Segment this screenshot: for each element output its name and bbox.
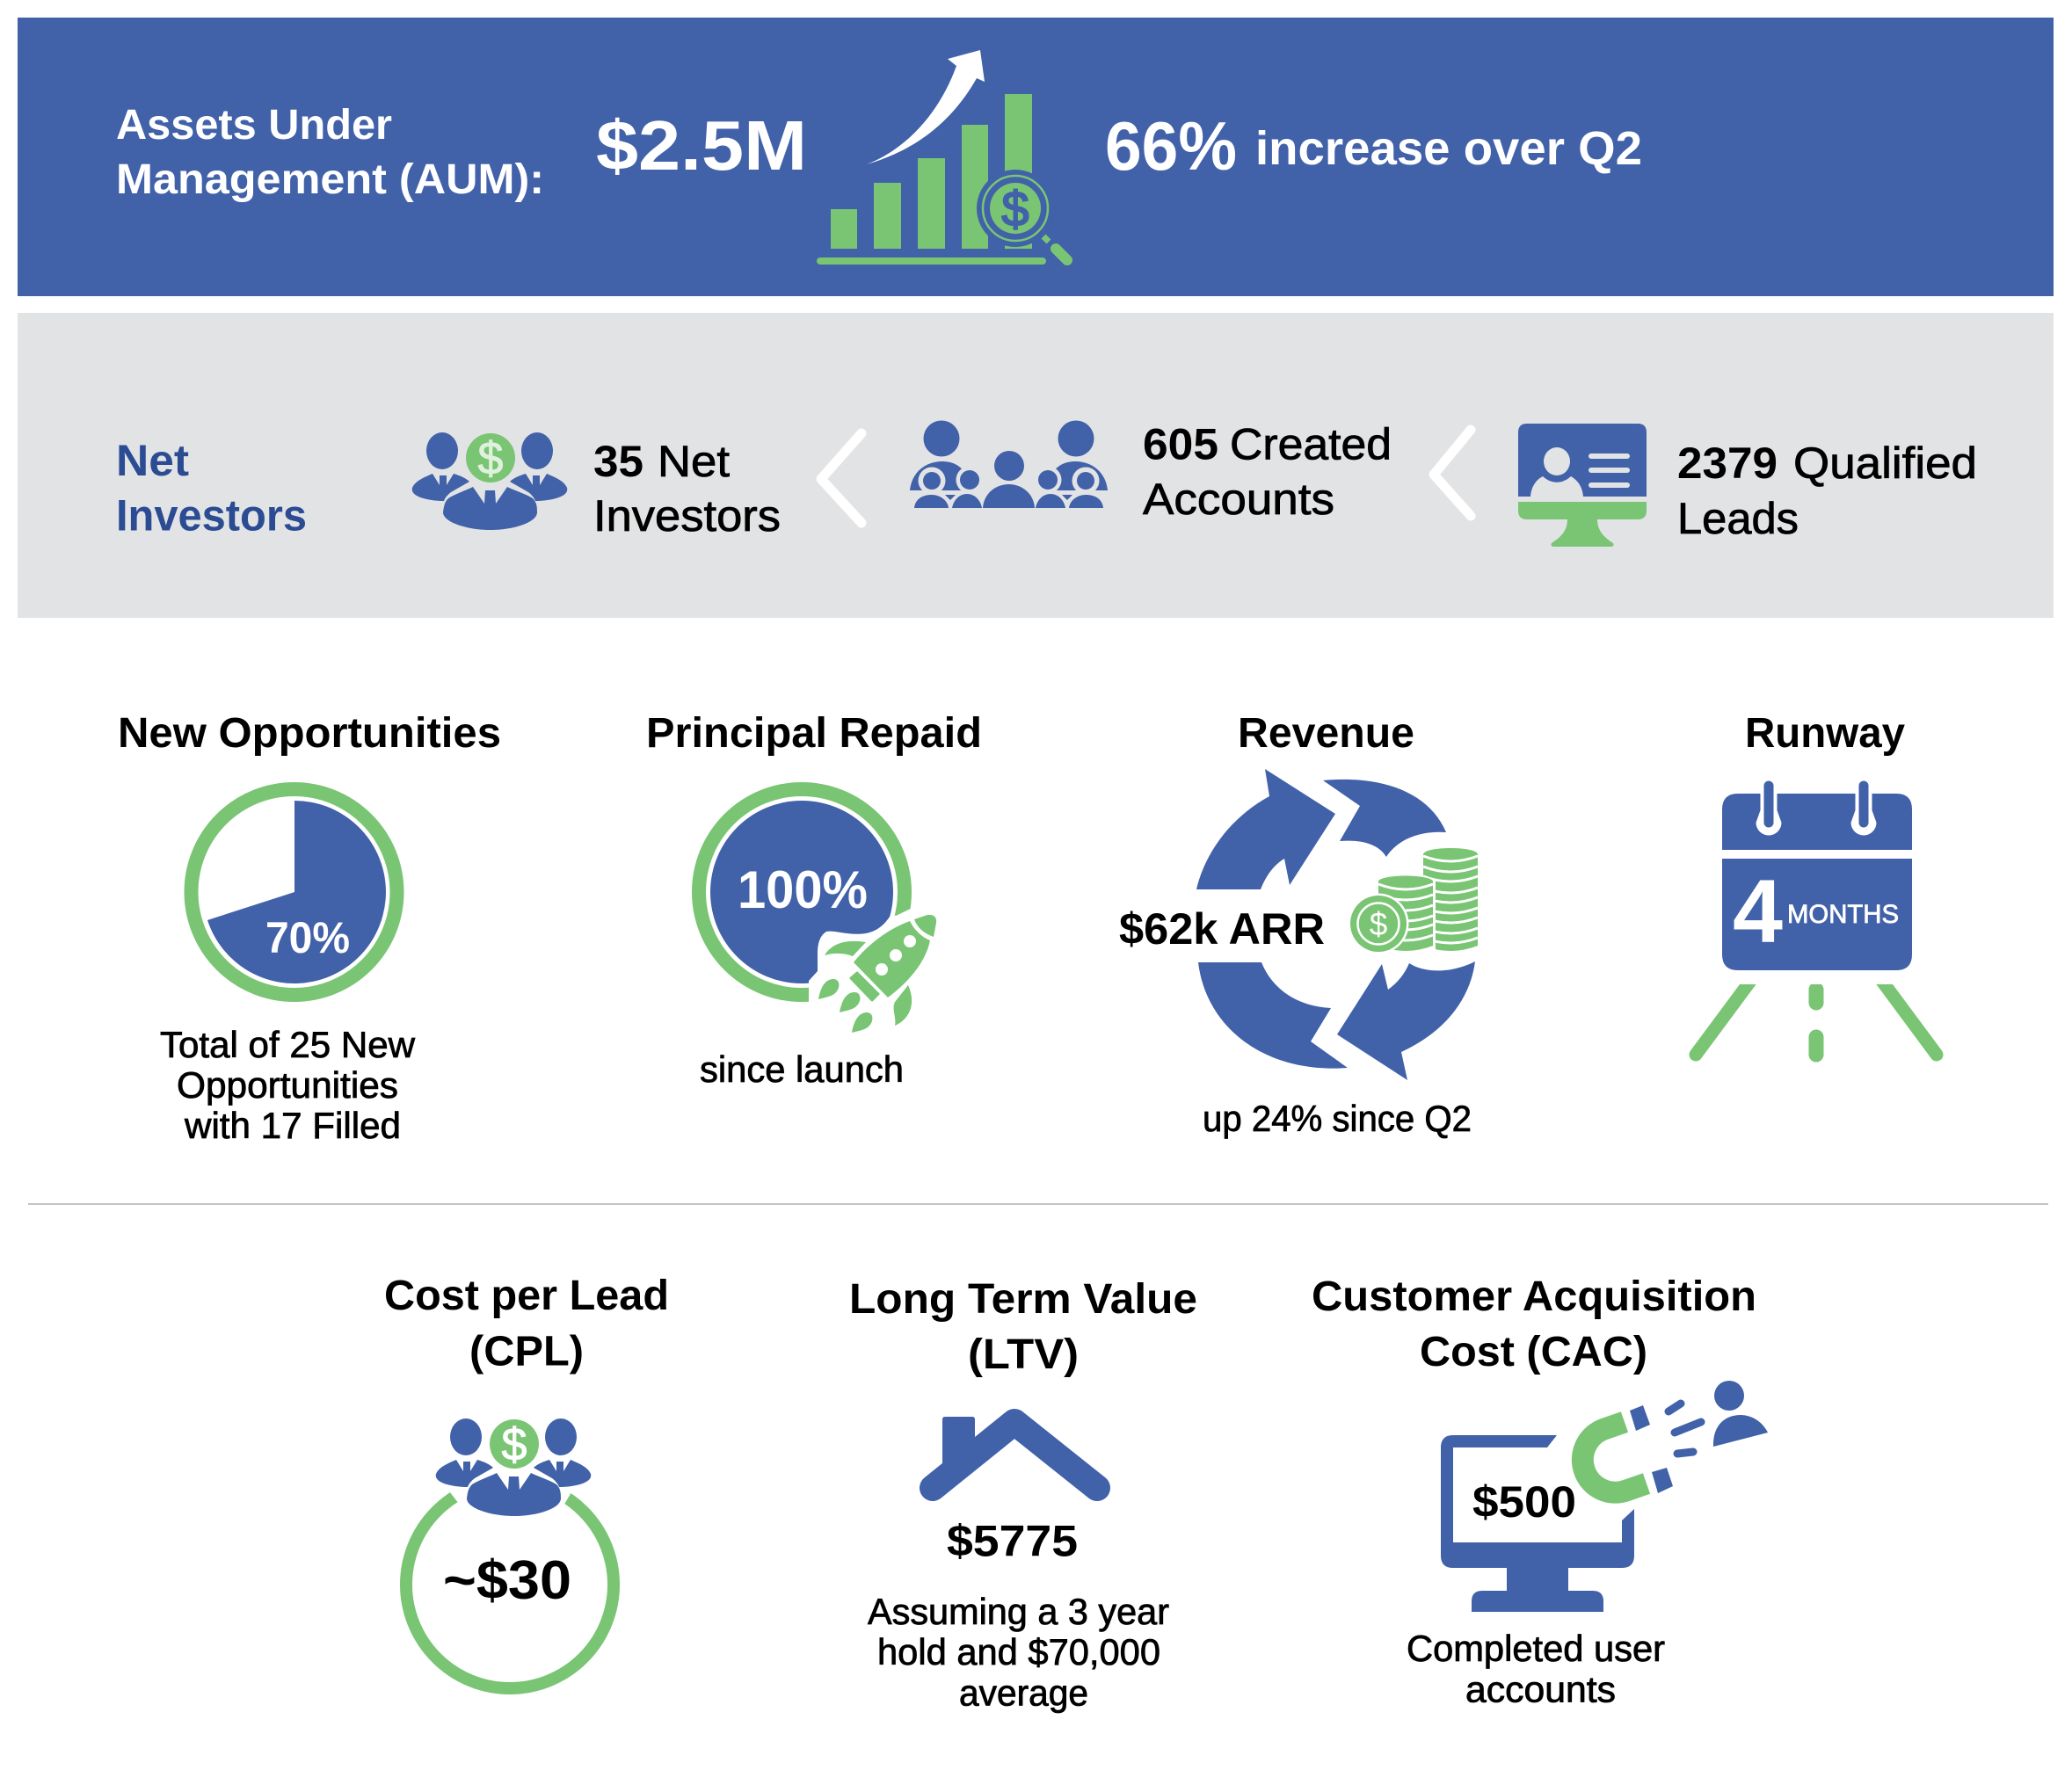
heading: long term value: (LTV) (968, 1331, 1079, 1378)
icon: created accounts group (910, 420, 1108, 508)
value: 5775 dollars: $5775 (947, 1517, 1078, 1566)
icon: investors with dollar (412, 432, 567, 530)
icon: circular arrows (1196, 769, 1475, 1080)
panel: revenue (1119, 710, 1478, 1139)
icon: monitor (1441, 1435, 1634, 1612)
panel: assets under management banner (18, 18, 2054, 296)
icon: growth bar chart with magnifier (817, 50, 1067, 265)
icon: house roof (933, 1417, 1097, 1488)
heading: new opportunities: New Opportunities (118, 710, 501, 757)
icon: magnet attracting user (1582, 1381, 1768, 1493)
icon: road (1696, 972, 1937, 1055)
text: opportunities caption: Total of 25 New (160, 1024, 416, 1065)
text: ltv assumption: Assuming a 3 year (868, 1591, 1169, 1632)
text: up 24 percent: up 24% since Q2 (1203, 1098, 1472, 1139)
heading: long term value (849, 1276, 1197, 1378)
chart: 70 percent pie: 70% (265, 913, 350, 962)
heading: assets under management: Management (AUM): (116, 156, 544, 203)
text: opportunities caption (160, 1024, 416, 1146)
text: completed user accounts: Completed user (1407, 1628, 1665, 1669)
text: 35 net investors: 35 (593, 437, 643, 486)
text: 605 created accounts: Accounts (1143, 475, 1334, 524)
panel: cost per lead (384, 1273, 669, 1688)
text: 35 net investors (593, 437, 781, 541)
text: 35 net investors: Net (658, 437, 730, 486)
text: 2379 qualified leads: Qualified (1793, 439, 1977, 488)
icon: ring (406, 1481, 614, 1688)
value: 62k ARR: $62k ARR (1119, 904, 1325, 954)
chart: 100 percent circle: 100% (738, 860, 868, 919)
value: 30 dollars: ~$30 (443, 1550, 571, 1611)
panel: principal repaid (646, 710, 982, 1090)
text: opportunities caption: with 17 Filled (184, 1105, 401, 1146)
text: completed user accounts (1407, 1628, 1665, 1710)
arrow: chevron left (1434, 430, 1471, 516)
heading: cost per lead: Cost per Lead (384, 1273, 669, 1319)
icon: coin stacks (1349, 848, 1478, 956)
value: 66 percent increase: 66% (1105, 107, 1237, 185)
icon: coin stacks: $ (1370, 906, 1387, 942)
text: ltv assumption: hold and $70,000 (877, 1631, 1160, 1672)
value: 2.5M: $2.5M (596, 106, 807, 185)
text: opportunities caption: Opportunities (177, 1064, 398, 1106)
text: 35 net investors: Investors (593, 491, 781, 541)
icon: calendar 4 months: MONTHS (1787, 900, 1899, 929)
text: ltv assumption (868, 1591, 1169, 1714)
panel: runway (1696, 710, 1937, 1055)
text: 605 created accounts (1143, 420, 1392, 524)
chart: 100 percent circle (699, 789, 967, 1050)
icon: people with dollar (436, 1418, 591, 1516)
panel: customer acquisition cost (1312, 1273, 1768, 1710)
heading: cost per lead: (CPL) (469, 1329, 584, 1375)
heading: net investors (116, 436, 307, 540)
text: 605 created accounts: 605 (1143, 420, 1218, 469)
text: 2379 qualified leads: 2379 (1677, 439, 1778, 488)
panel: long term value (849, 1276, 1197, 1714)
icon: qualified lead monitor (1518, 424, 1647, 547)
heading: assets under management: Assets Under (116, 102, 392, 149)
heading: customer acquisition cost: Customer Acquisition (1312, 1273, 1756, 1320)
icon: rocket (818, 915, 936, 1033)
text: ltv assumption: average (959, 1672, 1088, 1714)
value: 66 percent increase (1105, 107, 1642, 185)
text: since launch: since launch (700, 1048, 904, 1090)
heading: principal repaid: Principal Repaid (646, 710, 982, 757)
chart: 70 percent pie (192, 789, 397, 995)
heading: customer acquisition cost (1312, 1273, 1756, 1375)
value: 500 dollars: $500 (1472, 1477, 1576, 1527)
icon: investors with dollar: $ (478, 433, 504, 484)
text: completed user accounts: accounts (1465, 1668, 1616, 1710)
icon: people with dollar: $ (502, 1419, 527, 1470)
value: 66 percent increase: increase over Q2 (1255, 122, 1642, 175)
icon: calendar 4 months (1722, 786, 1912, 970)
heading: cost per lead (384, 1273, 669, 1375)
heading: customer acquisition cost: Cost (CAC) (1420, 1329, 1647, 1375)
text: 2379 qualified leads (1677, 439, 1977, 543)
heading: long term value: Long Term Value (849, 1276, 1197, 1323)
icon: calendar 4 months: 4 (1733, 861, 1783, 961)
panel: new opportunities (118, 710, 501, 1146)
heading: net investors: Investors (116, 490, 307, 540)
text: 2379 qualified leads: Leads (1677, 494, 1799, 543)
heading: runway: Runway (1745, 710, 1905, 757)
heading: net investors: Net (116, 436, 189, 485)
arrow: chevron left (821, 433, 862, 523)
heading: assets under management (116, 102, 544, 203)
heading: revenue: Revenue (1238, 710, 1414, 757)
icon: growth bar chart with magnifier: $ (1001, 181, 1029, 236)
panel: net investors funnel (18, 313, 2054, 618)
text: 605 created accounts: Created (1230, 420, 1392, 469)
